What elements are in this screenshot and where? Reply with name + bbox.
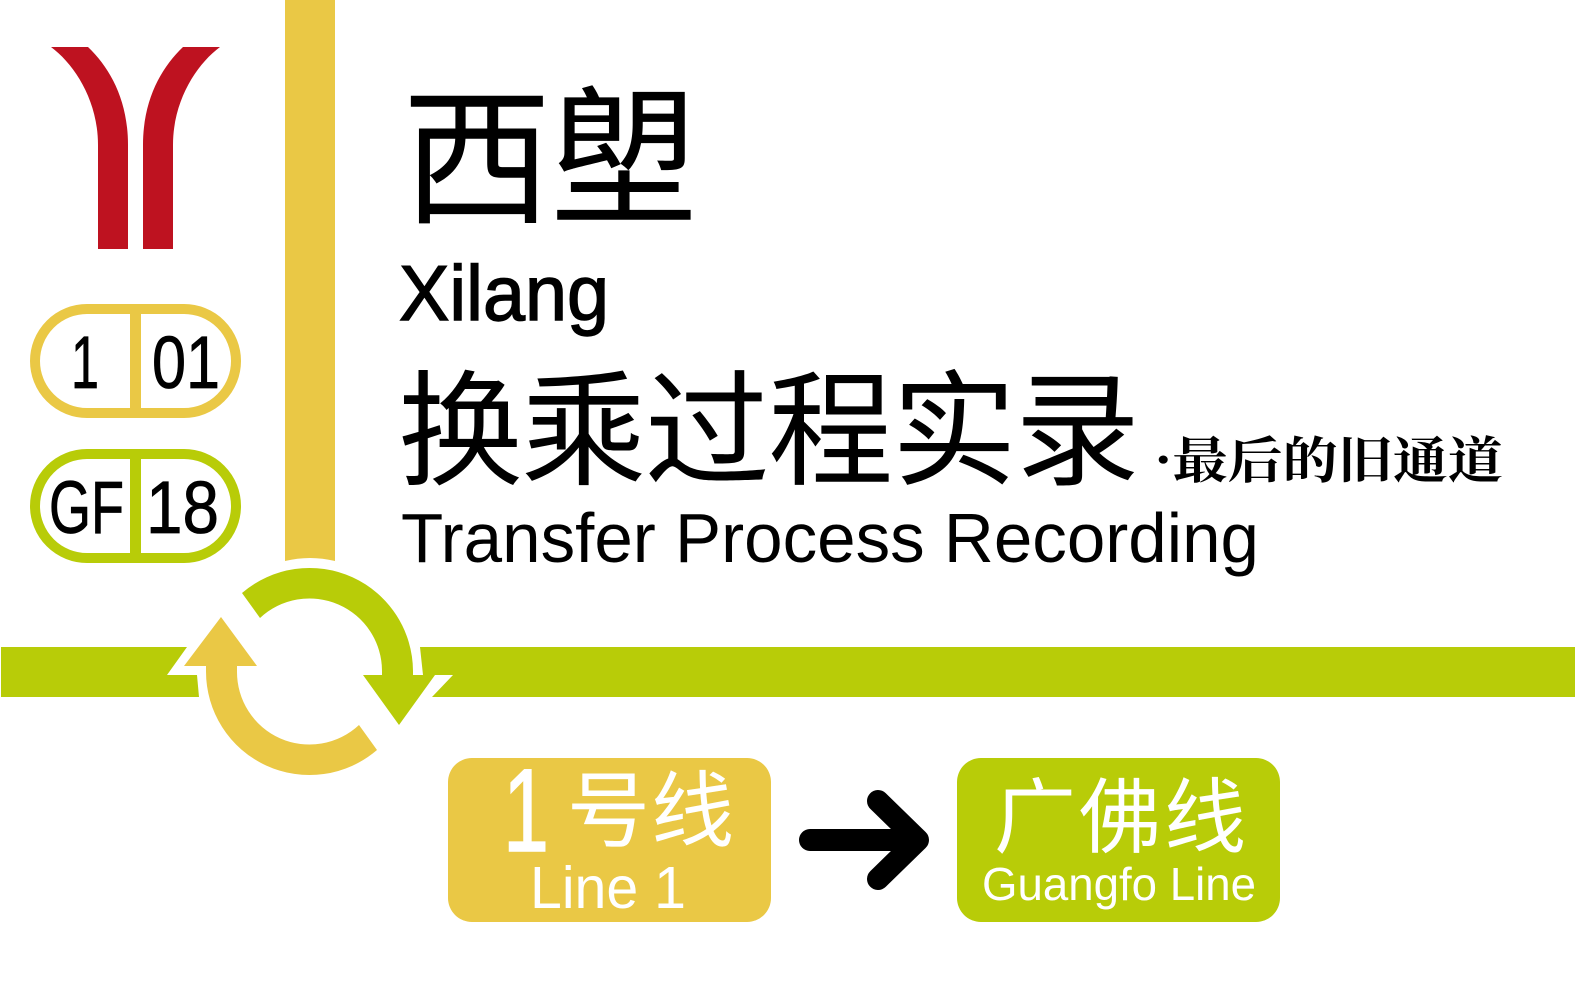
yellow line 1 vertical track bbox=[285, 0, 335, 561]
arrow: from line 1 to Guangfo line bbox=[810, 801, 918, 879]
yellow arrow bbox=[184, 617, 377, 775]
station name English: Xilang bbox=[399, 249, 609, 337]
station code badge: line 1: 1 bbox=[71, 321, 99, 404]
sign: line 1: 号线 bbox=[567, 744, 734, 864]
sign: Guangfo line: Guangfo Line bbox=[982, 858, 1256, 910]
heading English: Transfer Process Recording bbox=[401, 499, 1259, 577]
subtitle: the last old passage: ·最后的旧通道 bbox=[1154, 421, 1503, 493]
icon: transfer loop arrows bbox=[184, 568, 435, 775]
station name Chinese: 西塱 bbox=[402, 39, 699, 256]
station code badge: Guangfo line: GF bbox=[49, 466, 124, 549]
station code badge: Guangfo line bbox=[35, 449, 236, 563]
heading: transfer process recording: 换乘过程实录 bbox=[398, 330, 1140, 511]
sign: line 1: 1 bbox=[503, 745, 549, 877]
station code badge: Guangfo line: 18 bbox=[146, 466, 219, 549]
icon: Guangzhou Metro logo bbox=[51, 47, 220, 249]
station code badge: line 1: 01 bbox=[152, 321, 220, 404]
sign: Guangfo line bbox=[957, 751, 1280, 922]
sign: Guangfo line: 广佛线 bbox=[994, 751, 1246, 870]
sign: line 1: Line 1 bbox=[530, 855, 686, 921]
green arrow bbox=[242, 568, 435, 725]
green Guangfo line horizontal track bbox=[1, 647, 1575, 697]
station code badge: line 1 bbox=[35, 304, 236, 418]
sign: line 1 bbox=[448, 744, 771, 922]
